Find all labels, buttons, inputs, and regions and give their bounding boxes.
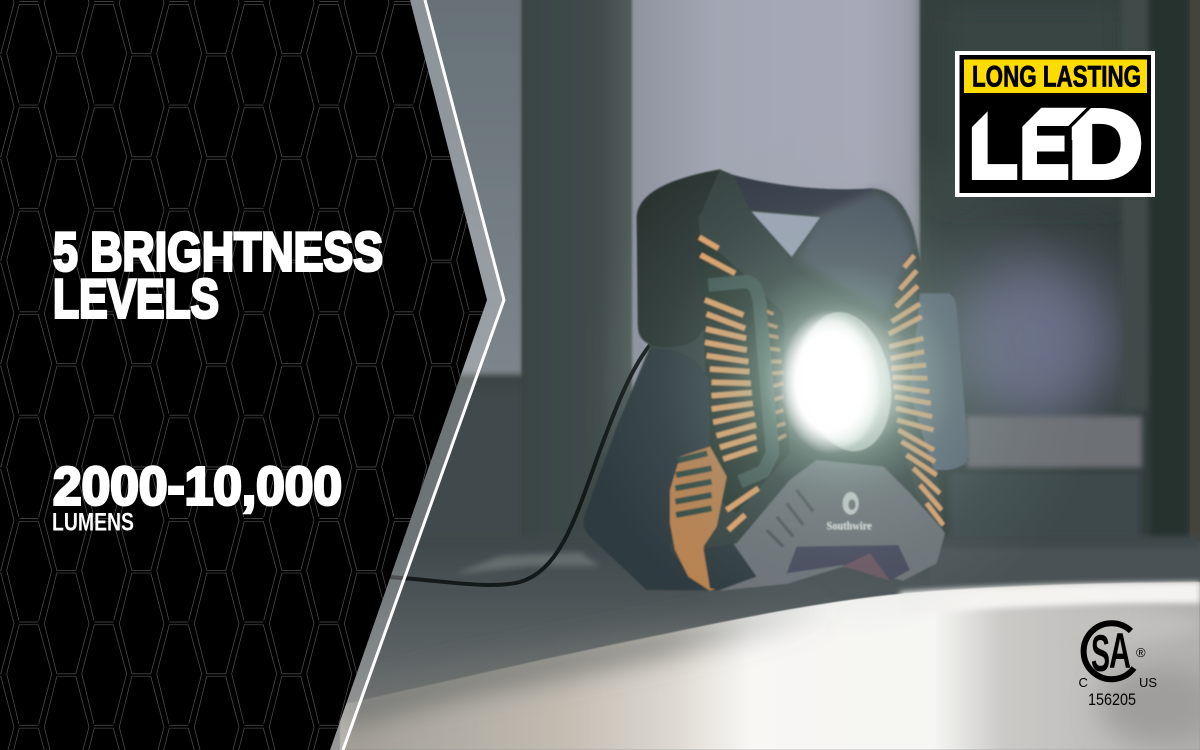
cord — [388, 345, 650, 585]
fins: left column — [699, 237, 758, 530]
logo mark: Southwire: Southwire — [827, 518, 872, 532]
fin bed dark — [698, 235, 790, 513]
badge: long lasting LED: L — [969, 90, 1018, 199]
right top panel — [797, 192, 913, 313]
light haze — [500, 120, 1200, 640]
lens glare — [780, 310, 880, 454]
fins: second column — [763, 310, 786, 440]
badge: long lasting LED — [955, 51, 1155, 199]
heading: 5 brightness levels: LEVELS — [53, 268, 219, 330]
slots — [675, 453, 712, 515]
CSA certification mark: 156205 — [1088, 691, 1136, 709]
lamp body — [583, 169, 968, 591]
x-brace upper — [698, 183, 920, 327]
photo background: room interior — [330, 0, 1200, 600]
work light — [583, 169, 968, 591]
hex panel — [0, 0, 505, 750]
CSA certification mark: C — [1078, 675, 1088, 690]
fins: right column — [889, 256, 943, 525]
CSA certification mark: ® — [1136, 645, 1146, 660]
upper left lobe — [637, 169, 720, 347]
handle — [733, 175, 875, 215]
lower orange block — [670, 447, 737, 591]
floor with light beam — [330, 536, 1200, 750]
badge: long lasting LED: LONG LASTING — [972, 61, 1141, 94]
lower body — [703, 460, 945, 591]
CSA certification mark — [1078, 623, 1157, 709]
lens ring — [792, 305, 901, 458]
right bracket fill — [910, 293, 968, 470]
base notch — [787, 545, 910, 581]
heading: 5 brightness levels — [53, 220, 383, 330]
badge: long lasting LED: E — [1019, 90, 1069, 199]
dark foot — [703, 543, 757, 590]
lower leg — [583, 349, 710, 590]
heading: 5 brightness levels: 5 BRIGHTNESS — [53, 220, 383, 282]
CSA certification mark: US — [1139, 675, 1157, 690]
CSA certification mark: A — [1109, 623, 1131, 679]
badge: long lasting LED: D — [1068, 90, 1143, 199]
folding bracket left — [708, 282, 773, 482]
ribs on lower body — [767, 490, 813, 547]
CSA certification mark: S — [1091, 625, 1110, 683]
logo mark: Southwire — [827, 492, 872, 532]
window under handle — [752, 212, 820, 257]
stat: 2000-10,000 lumens: LUMENS — [52, 508, 134, 536]
white chevron line — [343, 0, 504, 750]
stat: 2000-10,000 lumens: 2000-10,000 — [53, 456, 342, 516]
